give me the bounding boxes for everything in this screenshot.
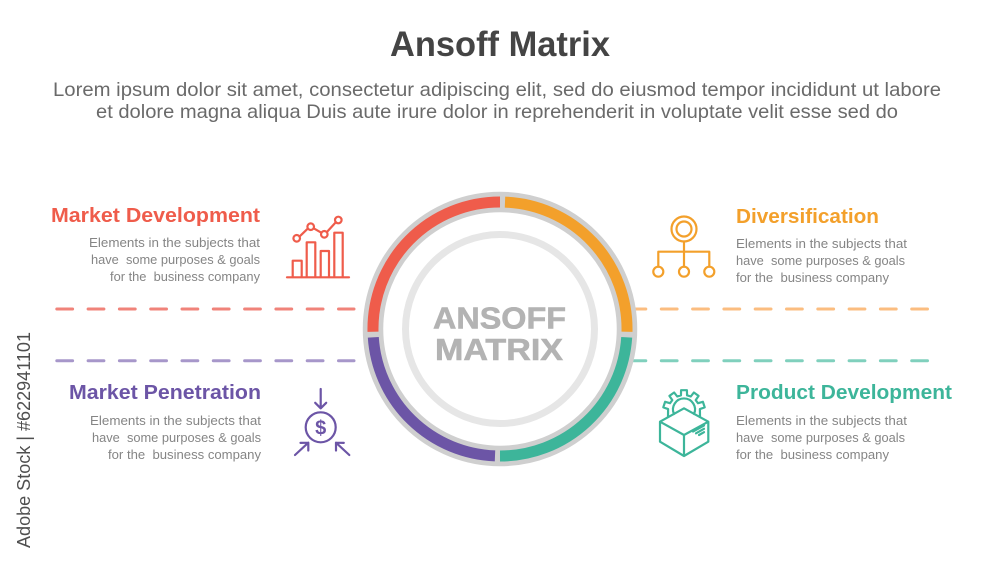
intro text block: Lorem ipsum dolor sit amet, consectetur adipiscing elit, sed do eiusmod tempor incididunt ut labore bbox=[53, 79, 941, 101]
description bbox=[90, 413, 261, 462]
description: for the business company bbox=[110, 269, 260, 284]
panel: diversification bbox=[736, 205, 907, 285]
panel: market penetration bbox=[69, 381, 261, 462]
description: for the business company bbox=[736, 447, 889, 462]
icon: bar chart with trend line bbox=[287, 217, 349, 277]
description: Elements in the subjects that bbox=[90, 413, 261, 428]
description: for the business company bbox=[736, 270, 889, 285]
intro text block bbox=[53, 79, 941, 123]
icon: dollar with inward arrows bbox=[295, 389, 349, 455]
segment: product development bbox=[500, 337, 627, 456]
dashed connector: market penetration bbox=[57, 359, 354, 362]
heading: Product Development bbox=[736, 381, 952, 404]
description: have some purposes & goals bbox=[736, 253, 905, 268]
stock credit label: Adobe Stock | #622941101 bbox=[13, 332, 34, 548]
title: Ansoff Matrix bbox=[390, 25, 611, 64]
dashed connector: product development bbox=[630, 359, 928, 362]
central circle diagram bbox=[373, 202, 627, 456]
panel: product development bbox=[736, 381, 952, 462]
description: Elements in the subjects that bbox=[736, 236, 907, 251]
dashed connector: diversification bbox=[630, 308, 928, 310]
icon: dollar with inward arrows: $ bbox=[315, 418, 326, 440]
panel: market development bbox=[51, 204, 260, 284]
description: have some purposes & goals bbox=[736, 430, 905, 445]
description: have some purposes & goals bbox=[91, 252, 260, 267]
intro text block: et dolore magna aliqua Duis aute irure dolor in reprehenderit in voluptate velit esse sed do bbox=[96, 101, 898, 123]
icon: hierarchy tree bbox=[653, 216, 714, 277]
heading: Market Penetration bbox=[69, 381, 261, 404]
center label bbox=[433, 300, 566, 367]
segment: diversification bbox=[505, 202, 627, 332]
description: Elements in the subjects that bbox=[89, 235, 260, 250]
description: have some purposes & goals bbox=[92, 430, 261, 445]
center label: MATRIX bbox=[435, 332, 563, 367]
description bbox=[736, 413, 907, 462]
icon: box with gear bbox=[660, 390, 708, 456]
heading: Diversification bbox=[736, 205, 879, 228]
heading: Market Development bbox=[51, 204, 260, 227]
inner grey ring bbox=[406, 234, 594, 424]
segment: market penetration bbox=[373, 337, 495, 456]
description: for the business company bbox=[108, 447, 261, 462]
description bbox=[89, 235, 260, 284]
segment: market development bbox=[373, 202, 500, 332]
description bbox=[736, 236, 907, 285]
outer grey ring bbox=[373, 202, 627, 456]
description: Elements in the subjects that bbox=[736, 413, 907, 428]
dashed connector: market development bbox=[57, 308, 354, 310]
center label: ANSOFF bbox=[433, 300, 566, 336]
